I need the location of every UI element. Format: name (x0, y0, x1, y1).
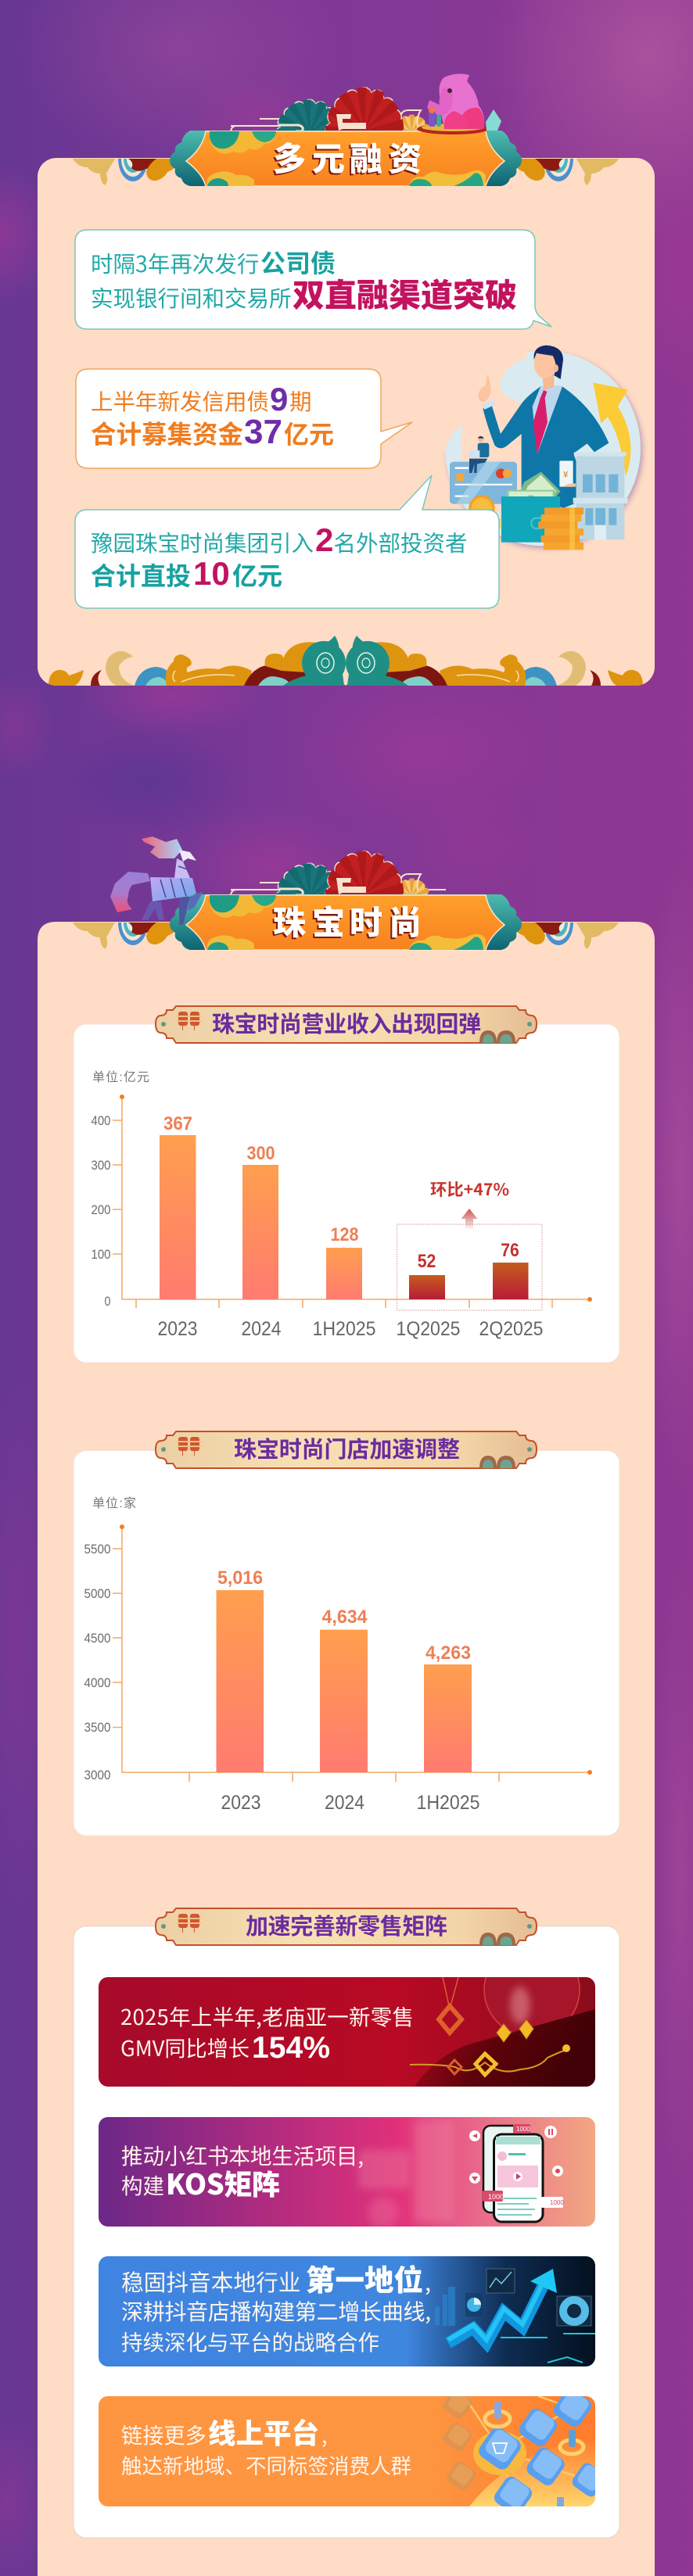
banner: online platforms: 触达新地域、不同标签消费人群 (121, 2449, 411, 2480)
x axis labels (221, 1792, 480, 1814)
section header: 珠宝时尚 ribbon (73, 851, 619, 950)
heading: 珠宝时尚门店加速调整 (156, 1431, 537, 1468)
callout: 外部投资者: 亿元 (232, 557, 282, 593)
banner phone image: 1000 (516, 2126, 530, 2133)
chart axes (113, 1095, 592, 1308)
y axis values (84, 1542, 111, 1782)
bar chart: stores (84, 1496, 592, 1814)
callout: 公司债 double channel: 实现银行间和交易所 (91, 281, 292, 313)
banner: GMV growth (99, 1977, 595, 2087)
x axis labels: 2023 (158, 1318, 197, 1340)
bar values: 128 (330, 1224, 358, 1245)
bar values: 4,263 (425, 1643, 471, 1664)
y axis values: 3500 (84, 1720, 111, 1735)
banner: GMV growth: GMV同比增长 (120, 2031, 250, 2062)
y axis values: 400 (91, 1113, 111, 1128)
chart unit label: 单位:亿元 (92, 1070, 149, 1084)
banner network image (443, 2396, 595, 2506)
x axis labels: 1H2025 (313, 1318, 375, 1340)
bar values: 5,016 (217, 1567, 263, 1589)
bar values (163, 1113, 519, 1272)
y axis values: 4000 (84, 1675, 111, 1690)
callout: 信用债: 37 (244, 413, 282, 451)
callout: 外部投资者: 名外部投资者 (333, 526, 468, 558)
callout: QoQ growth: 环比+47% (430, 1177, 509, 1201)
callout: 外部投资者: 2 (315, 521, 333, 558)
y axis values: 5000 (84, 1586, 111, 1601)
callout: 公司债 double channel: 双直融渠道突破 (293, 269, 517, 316)
x axis labels: 2024 (325, 1792, 364, 1814)
y axis values: 100 (91, 1247, 111, 1262)
arrow: up (461, 1209, 477, 1230)
x axis labels: 2024 (241, 1318, 282, 1340)
heading: 加速完善新零售矩阵 (156, 1908, 537, 1945)
banner jewelry image (410, 1977, 595, 2087)
y axis values: 5500 (84, 1542, 111, 1557)
callout: 信用债 (76, 369, 412, 468)
callout: 外部投资者: 豫园珠宝时尚集团引入 (91, 526, 314, 558)
y axis values: 4500 (84, 1631, 111, 1646)
card: new retail matrix (74, 1926, 619, 2538)
y axis values (91, 1113, 111, 1309)
banner growth image (435, 2269, 595, 2363)
callout: 信用债: 上半年新发信用债 (91, 385, 269, 417)
callout: 信用债: 期 (289, 385, 312, 417)
chart unit label: 单位:家 (92, 1496, 136, 1510)
banner text: 第一地位 (306, 2256, 423, 2299)
bar values: 76 (501, 1240, 519, 1261)
panel: 多元融资 (38, 158, 655, 686)
banner: KOS matrix: KOS矩阵 (166, 2162, 280, 2203)
x axis labels: 1Q2025 (396, 1318, 460, 1340)
card: store chart (74, 1451, 619, 1836)
banner: Douyin leadership: 深耕抖音店播构建第二增长曲线, (121, 2295, 431, 2327)
y axis values: 200 (91, 1202, 111, 1217)
callout: 公司债 double channel: 时隔3年再次发行 (91, 247, 259, 279)
y axis values: 300 (91, 1158, 111, 1173)
highlight box (397, 1224, 542, 1310)
banner phone image (358, 2120, 564, 2228)
banner: GMV growth: 154% (252, 2031, 330, 2065)
bar values: 52 (418, 1251, 436, 1272)
bars (160, 1135, 529, 1299)
chart axes (113, 1524, 592, 1782)
banner: Douyin leadership: 持续深化与平台的战略合作 (121, 2325, 379, 2356)
section title: 珠宝时尚: 珠宝时尚 (273, 897, 422, 944)
bar values: 300 (247, 1143, 275, 1164)
callout: 信用债: 亿元 (284, 415, 334, 451)
banner text: , (425, 2266, 431, 2298)
callout: 外部投资者 (75, 475, 499, 608)
x axis labels: 2Q2025 (479, 1318, 543, 1340)
banner phone image: 1000 (550, 2199, 564, 2206)
illustration: businessman with finance icons: ¥ (563, 471, 569, 480)
heading: 珠宝时尚门店加速调整: 珠宝时尚门店加速调整 (234, 1431, 460, 1464)
bar values: 4,634 (322, 1607, 368, 1628)
banner text: 推动小红书本地生活项目, (121, 2139, 364, 2170)
banner text: 2025年上半年,老庙亚一新零售 (120, 2000, 414, 2031)
callout: 公司债 double channel (75, 230, 551, 329)
banner text: 链接更多 (121, 2418, 206, 2449)
banner text: , (321, 2418, 328, 2449)
x axis labels: 2023 (221, 1792, 261, 1814)
callout: 外部投资者: 10 (193, 555, 230, 592)
heading: 珠宝时尚营业收入出现回弹: 珠宝时尚营业收入出现回弹 (212, 1006, 481, 1039)
callout: 信用债: 合计募集资金 (91, 414, 243, 451)
bar chart: revenue (91, 1070, 592, 1340)
y axis values: 0 (105, 1294, 111, 1309)
section header: 多元融资 ribbon (73, 87, 619, 186)
card: revenue chart (74, 1024, 619, 1363)
section title: 多元融资: 多元融资 (273, 133, 422, 181)
bars (216, 1590, 472, 1772)
x axis labels: 1H2025 (416, 1792, 480, 1814)
x axis labels (158, 1318, 543, 1340)
icon: qilin creature (110, 837, 203, 925)
callout: 外部投资者: 合计直投 (91, 557, 191, 593)
heading: 加速完善新零售矩阵: 加速完善新零售矩阵 (246, 1908, 447, 1941)
banner: KOS matrix (99, 2117, 595, 2228)
callout: 信用债: 9 (270, 381, 288, 417)
icon: pink elephant mascot (417, 73, 501, 134)
banner text: 稳固抖音本地行业 (121, 2266, 300, 2298)
banner text: 线上平台 (208, 2412, 319, 2452)
y axis values: 3000 (84, 1768, 111, 1782)
heading: 珠宝时尚营业收入出现回弹 (156, 1006, 537, 1043)
callout: 公司债 double channel: 公司债 (260, 244, 336, 280)
panel: 珠宝时尚 (38, 922, 655, 2576)
banner: KOS matrix: 构建 (121, 2169, 164, 2200)
illustration: businessman with finance icons (436, 334, 641, 550)
bar values: 367 (163, 1113, 192, 1134)
banner: Douyin leadership (99, 2256, 595, 2366)
banner phone image: 1000 (488, 2193, 504, 2201)
bottom cloud ornament (48, 636, 643, 686)
banner: online platforms (99, 2396, 595, 2506)
bar values (217, 1567, 471, 1664)
